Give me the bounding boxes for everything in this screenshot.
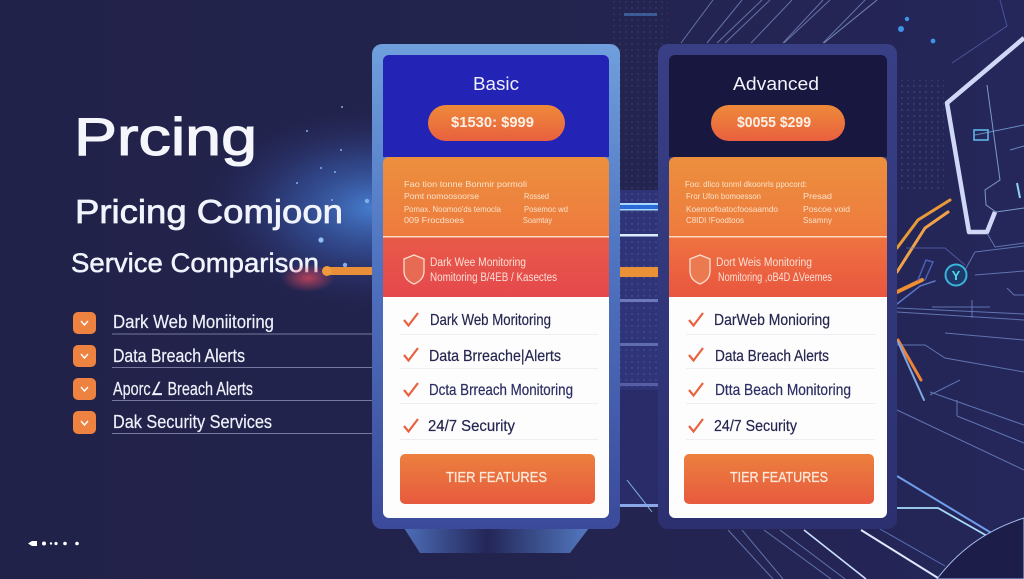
icon: shield (690, 255, 710, 284)
list item 1 (73, 312, 372, 334)
dark arc corner (937, 518, 1024, 579)
advanced monitoring band: Dort Weis Monitoring (716, 257, 812, 269)
bottom right lines (728, 476, 1003, 579)
top circuit lines (624, 0, 1007, 63)
list item 2 (73, 345, 372, 368)
basic details: 009 Frocdsoes (404, 215, 464, 225)
basic name: Basic (473, 73, 519, 94)
basic feature list (383, 297, 609, 518)
basic header (383, 55, 609, 157)
advanced details: Foo: dlico tonml dkoonrls ppocord: (685, 179, 807, 189)
middle strip between cards (612, 0, 668, 512)
advanced monitoring band: Nomitoring ,oB4D ΔVeemes (718, 272, 832, 284)
advanced name: Advanced (733, 73, 819, 94)
advanced details: C8IDI !Foodtoos (686, 215, 744, 225)
connector: basic to advanced (620, 267, 658, 277)
stand under basic card (404, 528, 589, 553)
list item 3 (73, 378, 372, 401)
decorative stars (296, 106, 369, 267)
basic details: Pomax. Noomoo'ds temocla (404, 204, 501, 214)
basic button (400, 454, 595, 504)
main title: Prcing (74, 108, 257, 167)
section heading: Service Comparison (71, 248, 319, 278)
basic price pill: $1530: $999 (451, 115, 534, 131)
basic monitoring band: Nomitoring B/4EB / Kasectes (430, 272, 557, 284)
advanced button (684, 454, 874, 504)
advanced feature list: Data Breach Alerts (715, 348, 829, 365)
advanced price pill (711, 105, 845, 141)
badge icon right (946, 264, 966, 286)
connector: left to basic card (281, 264, 384, 292)
basic price pill (428, 105, 565, 141)
advanced feature list: DarWeb Monioring (714, 312, 830, 329)
advanced feature list: Dtta Beach Monitoring (715, 382, 851, 399)
advanced details: Poscoe void (803, 204, 850, 214)
feature list (73, 312, 372, 434)
circuit lines lower right (897, 233, 1024, 470)
panel: advanced card (658, 44, 897, 529)
basic monitoring band: Dark Wee Monitoring (430, 257, 526, 269)
advanced details: Ssamny (803, 215, 833, 225)
advanced feature list (669, 297, 887, 518)
basic details (383, 157, 609, 236)
advanced details: Fror Ufon bomoesson (686, 191, 761, 201)
list item 1: Dark Web Moniitoring (113, 312, 274, 332)
circuit frame right (947, 38, 1024, 232)
basic details: Rossed (524, 191, 549, 201)
basic details: Pomt nomoosoorse (404, 191, 479, 201)
basic feature list: 24/7 Security (428, 418, 515, 435)
basic button: TIER FEATURES (446, 469, 547, 486)
advanced monitoring band (669, 238, 887, 298)
basic details: Posemoc wd (524, 204, 568, 214)
panel: basic card (372, 44, 620, 529)
badge icon right: Y (952, 268, 961, 283)
basic feature list: Dark Web Moritoring (430, 312, 551, 329)
list item 3: Aporc∠ Breach Alerts (113, 379, 253, 399)
icon: shield (404, 255, 424, 284)
blue dots top right (898, 17, 935, 43)
basic monitoring band (383, 238, 609, 298)
basic details: Soamtay (523, 215, 553, 225)
advanced price pill: $0055 $299 (737, 115, 811, 131)
list item 4 (73, 411, 372, 434)
basic details: Fao tion tonne Bonmir pormoli (404, 179, 527, 189)
pagination dots (28, 541, 79, 546)
basic feature list: Data Brreache|Alerts (429, 348, 561, 365)
advanced details: Presad (803, 191, 832, 201)
advanced details (669, 157, 887, 236)
basic feature list: Dcta Brreach Monitoring (429, 382, 573, 399)
advanced header (669, 55, 887, 157)
list item 2: Data Breach Alerts (113, 346, 245, 366)
dot grid right (900, 80, 944, 190)
orange wires (897, 200, 950, 400)
subtitle: Pricing Comjoon (75, 193, 343, 230)
advanced button: TIER FEATURES (730, 469, 828, 486)
advanced feature list: 24/7 Security (714, 418, 797, 435)
list item 4: Dak Security Services (113, 412, 272, 432)
advanced details: Koemorfoatocfoosaamdo (686, 204, 778, 214)
